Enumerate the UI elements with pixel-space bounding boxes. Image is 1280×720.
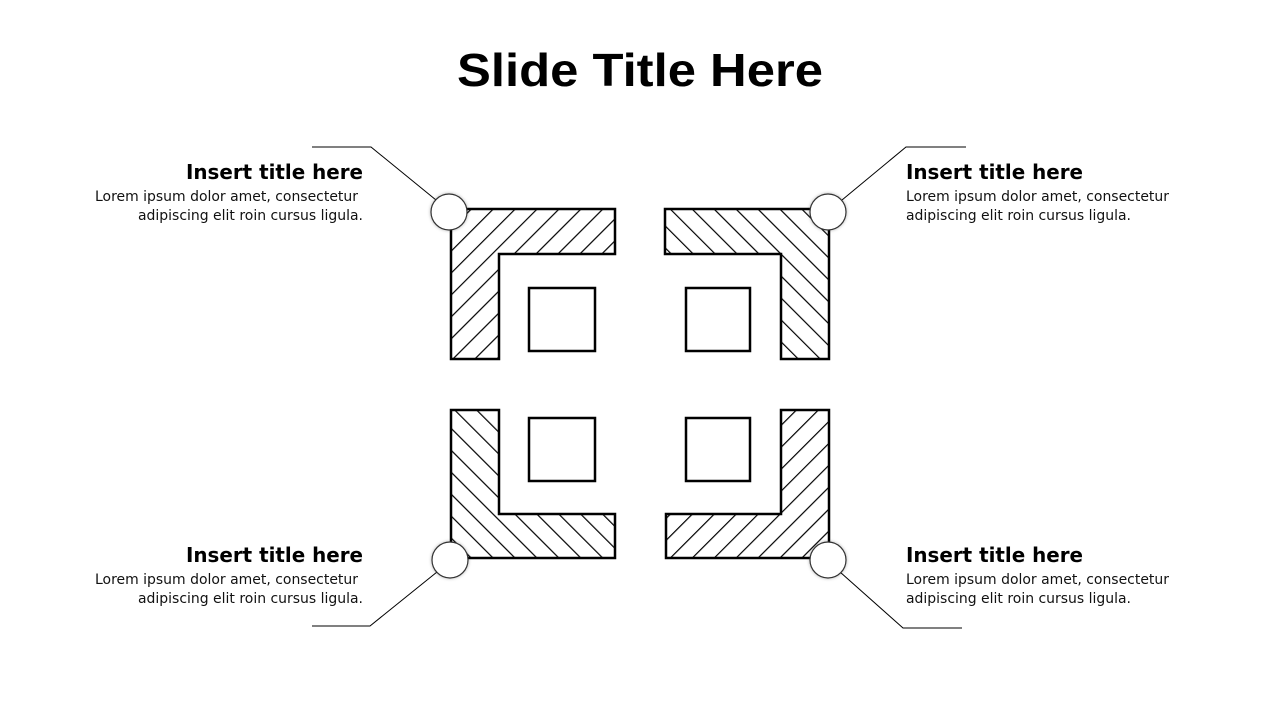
text block: bottom-left: Insert title here bbox=[186, 543, 363, 567]
text block: top-left bbox=[95, 160, 363, 224]
connector: top-left bbox=[312, 147, 436, 200]
shape: top-left corner bbox=[451, 209, 615, 359]
text block: top-right bbox=[906, 160, 1169, 224]
connector: bottom-left bbox=[312, 572, 437, 626]
shape: top-right corner bbox=[665, 209, 829, 359]
shape: bottom-left corner bbox=[451, 410, 615, 558]
text block: top-right: adipiscing elit roin cursus ligula. bbox=[906, 208, 1131, 224]
text block: top-left: Lorem ipsum dolor amet, consectetur bbox=[95, 189, 358, 205]
title: Slide Title Here bbox=[457, 44, 823, 96]
text block: top-left: Insert title here bbox=[186, 160, 363, 184]
text block: bottom-right: adipiscing elit roin cursus ligula. bbox=[906, 591, 1131, 607]
text block: bottom-right: Insert title here bbox=[906, 543, 1083, 567]
text block: top-right: Lorem ipsum dolor amet, consectetur bbox=[906, 189, 1169, 205]
text block: top-left: adipiscing elit roin cursus ligula. bbox=[138, 208, 363, 224]
shape: bottom-right corner bbox=[666, 410, 829, 558]
text block: bottom-right bbox=[906, 543, 1169, 607]
text block: bottom-left: Lorem ipsum dolor amet, consectetur bbox=[95, 572, 358, 588]
text block: bottom-left bbox=[95, 543, 363, 607]
text block: bottom-right: Lorem ipsum dolor amet, consectetur bbox=[906, 572, 1169, 588]
text block: bottom-left: adipiscing elit roin cursus ligula. bbox=[138, 591, 363, 607]
text block: top-right: Insert title here bbox=[906, 160, 1083, 184]
connector: bottom-right bbox=[840, 572, 962, 628]
connector: top-right bbox=[842, 147, 966, 200]
marker circles bbox=[431, 194, 846, 578]
